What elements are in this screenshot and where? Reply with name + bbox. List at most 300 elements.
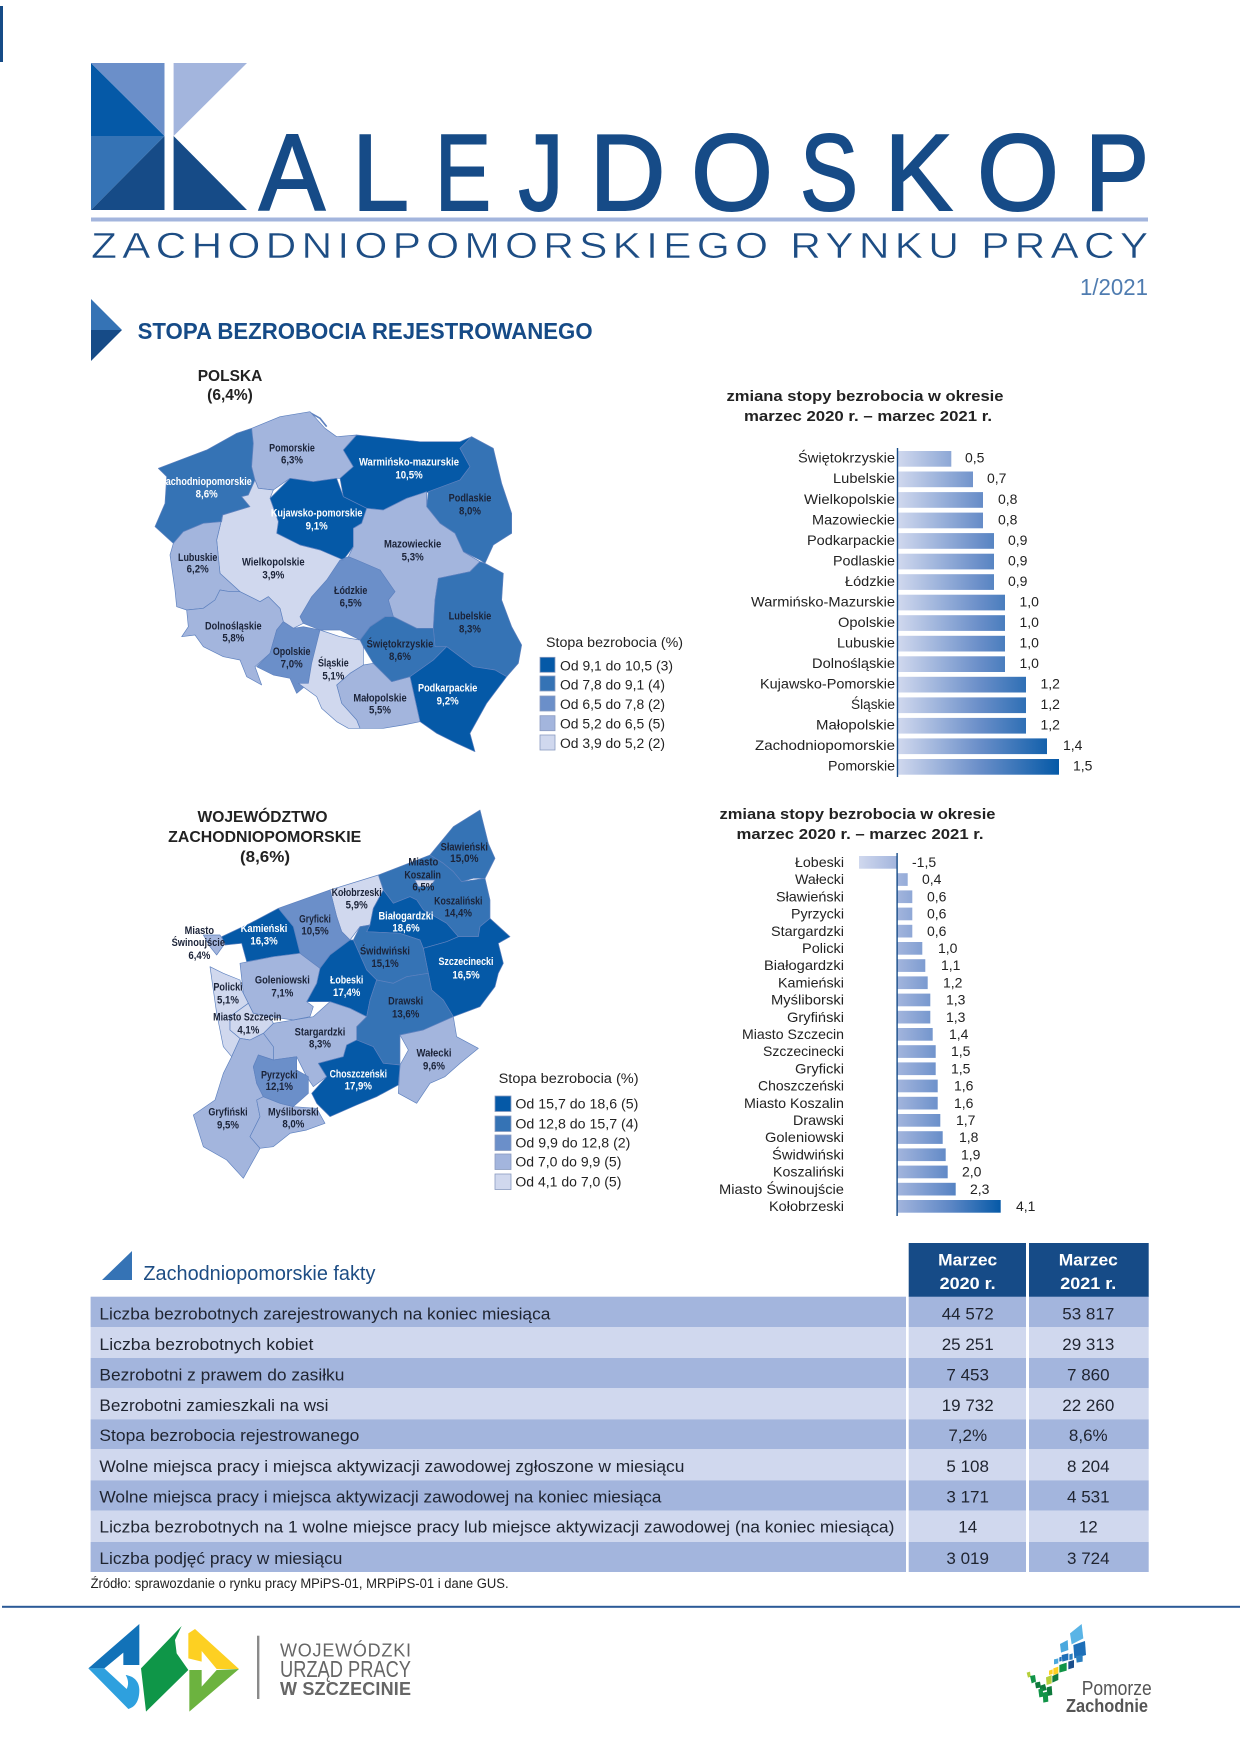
bar: Kujawsko-Pomorskie: [760, 676, 1060, 692]
bar: Świdwiński: Świdwiński: [772, 1145, 844, 1162]
label: Opolskie: 7,0%: [281, 658, 303, 670]
region: Lubelskie: [433, 562, 522, 677]
label: Miasto Koszalin: [404, 856, 441, 894]
table: Zachodniopomorskie facts: [91, 1243, 1149, 1572]
label: Małopolskie: Małopolskie: [353, 693, 407, 705]
label: Łobeski: [330, 975, 363, 999]
logo text: WUP Szczecin: URZĄD PRACY: [280, 1656, 411, 1682]
bar: Opolskie: 1,0: [1020, 614, 1039, 630]
county: Goleniowski: [240, 953, 320, 1020]
bar: Dolnośląskie: Dolnośląskie: [812, 655, 895, 671]
region: Dolnośląskie: [182, 590, 283, 685]
row: registered unemployed: Liczba bezrobotnych zarejestrowanych na koniec miesiąca: [99, 1304, 551, 1323]
county: Koszaliński: [378, 855, 490, 937]
map: Zachodniopomorskie by county: [172, 810, 510, 1178]
county: Choszczeński: [312, 1040, 400, 1117]
bar: Pyrzycki: Pyrzycki: [791, 906, 844, 922]
row: unemployed women: [91, 1327, 1149, 1358]
row: jobs taken up: 3 019: [946, 1549, 989, 1568]
bar: Gryfiński: Gryfiński: [787, 1009, 844, 1025]
row: unemployed per vacancy: Liczba bezrobotnych na 1 wolne miejsce pracy lub miejsce aktywizacji zawodowej (na koniec miesiąca): [99, 1518, 894, 1537]
label: Choszczeński: [330, 1068, 387, 1092]
bar: Miasto Koszalin: 1,6: [954, 1095, 974, 1111]
title: ALEJDOSKOP: S: [800, 112, 858, 234]
bar: Policki: [802, 940, 958, 956]
label: Gryficki: [299, 914, 331, 938]
row: vacancies at month end: [91, 1480, 1149, 1511]
bar: Kołobrzeski: Kołobrzeski: [769, 1198, 844, 1214]
label: Zachodniopomorskie: [160, 476, 252, 501]
legend: county map: Od 4,1 do 7,0 (5): [515, 1174, 621, 1190]
label: Świdwiński: Świdwiński: [360, 944, 410, 957]
row: vacancies reported: 8 204: [1067, 1457, 1110, 1476]
label: Miasto Szczecin: Miasto Szczecin: [213, 1012, 281, 1024]
issue number: 1/2021: [1080, 274, 1148, 300]
bar: Wałecki: Wałecki: [795, 871, 844, 887]
row: rural residents: 22 260: [1062, 1396, 1114, 1415]
bar: Pyrzycki: [791, 906, 947, 922]
region: Małopolskie: [337, 663, 420, 728]
bar: Świętokrzyskie: 0,5: [965, 450, 985, 466]
title: ALEJDOSKOP: D: [590, 112, 666, 234]
label: Małopolskie: [353, 693, 407, 717]
label: Kujawsko-pomorskie: 9,1%: [306, 520, 328, 532]
row: registered unemployed: [91, 1297, 1149, 1327]
label: Drawski: [388, 995, 423, 1020]
county: Stargardzki: [263, 1002, 367, 1087]
title: ALEJDOSKOP: J: [518, 112, 564, 234]
label: Łódzkie: 6,5%: [340, 598, 362, 610]
label: Szczecinecki: [438, 956, 494, 981]
row: unemployment rate: 7,2%: [948, 1426, 987, 1445]
region: Wielkopolskie: [217, 480, 343, 628]
bar: Gryficki: Gryficki: [795, 1060, 844, 1076]
bar: Dolnośląskie: 1,0: [1020, 655, 1039, 671]
facts heading: Zachodniopomorskie fakty: [143, 1263, 375, 1285]
label: Lubuskie: 6,2%: [187, 564, 209, 576]
label: Białogardzki: [378, 910, 434, 935]
bar: Mazowieckie: Mazowieckie: [812, 511, 895, 527]
title: ALEJDOSKOP: O: [691, 112, 773, 234]
row: entitled to benefit: 7 860: [1067, 1366, 1110, 1385]
row: vacancies at month end: 4 531: [1067, 1487, 1110, 1506]
logo mark: WUP Szczecin: [88, 1624, 239, 1712]
heading: Zachodniopomorskie voivodeship: (8,6%): [240, 849, 290, 866]
bar chart: counties: [719, 853, 1036, 1216]
label: Kamieński: [241, 923, 287, 947]
label: Lubuskie: Lubuskie: [178, 552, 217, 564]
label: Choszczeński: Choszczeński: [330, 1068, 387, 1080]
label: Miasto Koszalin: 6,5%: [412, 882, 435, 894]
label: Świętokrzyskie: Świętokrzyskie: [367, 637, 433, 650]
label: Kujawsko-pomorskie: [271, 508, 363, 532]
bar: Zachodniopomorskie: 1,4: [1063, 737, 1083, 753]
label: Choszczeński: 17,9%: [345, 1080, 372, 1092]
masthead rule: [91, 218, 1148, 222]
bar: Miasto Szczecin: Miasto Szczecin: [742, 1026, 844, 1042]
label: Łobeski: Łobeski: [330, 975, 363, 987]
logo text: Pomorze Zachodnie: Zachodnie: [1066, 1696, 1148, 1716]
bar: Wielkopolskie: Wielkopolskie: [804, 491, 895, 507]
legend: county map: Stopa bezrobocia (%): [499, 1071, 639, 1086]
bar: Śląskie: [851, 695, 1060, 713]
heading: Zachodniopomorskie voivodeship: ZACHODNIOPOMORSKIE: [168, 829, 361, 846]
label: Miasto Szczecin: [213, 1012, 281, 1036]
label: Warmińsko-mazurskie: [359, 457, 459, 482]
facts heading: [102, 1251, 375, 1285]
title: ALEJDOSKOP: O: [977, 112, 1059, 234]
bar: Świdwiński: 1,9: [961, 1146, 981, 1162]
label: Podlaskie: Podlaskie: [449, 493, 491, 505]
label: Lubelskie: [449, 610, 491, 635]
bar: Szczecinecki: Szczecinecki: [763, 1043, 844, 1059]
heading: Zachodniopomorskie voivodeship: [168, 808, 361, 866]
bar: Kołobrzeski: 4,1: [1016, 1198, 1036, 1214]
bar: Lubelskie: [833, 470, 1007, 487]
label: Miasto Świnoujście: [172, 925, 225, 962]
label: Drawski: Drawski: [388, 995, 423, 1007]
heading: Zachodniopomorskie voivodeship: WOJEWÓDZTWO: [198, 808, 328, 826]
row: unemployed women: Liczba bezrobotnych kobiet: [99, 1335, 314, 1354]
bar: Mazowieckie: [812, 511, 1018, 528]
title: ALEJDOSKOP: [259, 112, 1149, 234]
label: Kołobrzeski: Kołobrzeski: [332, 887, 382, 899]
bar: Podkarpackie: Podkarpackie: [807, 532, 895, 548]
label: Śląskie: 5,1%: [322, 670, 345, 682]
region: Podkarpackie: [410, 647, 507, 752]
row: entitled to benefit: Bezrobotni z prawem do zasiłku: [99, 1366, 344, 1385]
label: Zachodniopomorskie: Zachodniopomorskie: [160, 476, 252, 488]
chart heading: counties: [720, 807, 996, 843]
bar: Opolskie: Opolskie: [838, 614, 895, 630]
bar: Goleniowski: [765, 1129, 979, 1145]
label: Gryficki: 10,5%: [301, 926, 329, 938]
county: Kołobrzeski: [330, 875, 383, 940]
label: Kujawsko-pomorskie: Kujawsko-pomorskie: [271, 508, 363, 520]
label: Łódzkie: Łódzkie: [334, 585, 367, 597]
bar: Śląskie: Śląskie: [851, 695, 895, 712]
row: unemployment rate: Stopa bezrobocia rejestrowanego: [99, 1426, 359, 1445]
label: Wałecki: Wałecki: [416, 1048, 452, 1060]
label: Policki: 5,1%: [217, 994, 239, 1006]
label: Pomorskie: [269, 443, 315, 467]
county: Wałecki: [398, 1017, 478, 1103]
bar: Świętokrzyskie: [798, 449, 985, 467]
row: unemployed per vacancy: 14: [958, 1518, 977, 1537]
label: Myśliborski: Myśliborski: [268, 1107, 319, 1119]
label: Podkarpackie: [418, 683, 477, 707]
table header: Marzec 2021: 2021 r.: [1060, 1274, 1116, 1293]
bar: Łódzkie: [845, 573, 1028, 590]
bar: Warmińsko-Mazurskie: Warmińsko-Mazurskie: [751, 593, 895, 609]
region: Pomorskie: [252, 412, 357, 490]
heading: Polska: (6,4%): [207, 387, 253, 404]
row: vacancies at month end: 3 171: [946, 1487, 989, 1506]
bar: Białogardzki: [764, 957, 961, 973]
label: Podkarpackie: Podkarpackie: [418, 683, 477, 695]
bar: Podkarpackie: 0,9: [1008, 532, 1028, 548]
logo text: WUP Szczecin: [280, 1640, 411, 1699]
region: Śląskie: [298, 630, 363, 728]
label: Policki: [213, 982, 243, 1006]
label: Świdwiński: [360, 944, 410, 970]
label: Małopolskie: 5,5%: [369, 705, 391, 717]
bar: Pomorskie: [828, 758, 1093, 775]
title: ALEJDOSKOP: K: [884, 112, 952, 234]
label: Pomorskie: 6,3%: [281, 455, 303, 467]
bar: Koszaliński: [773, 1164, 982, 1180]
bar: Lubelskie: Lubelskie: [833, 470, 895, 486]
label: Goleniowski: [255, 974, 310, 999]
label: Kamieński: Kamieński: [241, 923, 287, 935]
chart heading: voivodeships: [726, 389, 1004, 425]
label: Miasto Koszalin: Miasto: [408, 856, 439, 868]
label: Świdwiński: 15,1%: [371, 958, 399, 970]
legend: county map: Od 9,9 do 12,8 (2): [515, 1136, 630, 1150]
bar: Kołobrzeski: [769, 1198, 1036, 1214]
region: Warmińsko-mazurskie: [340, 435, 472, 510]
page edge marker: [0, 6, 3, 62]
label: Sławieński: Sławieński: [441, 842, 488, 854]
label: Pyrzycki: [261, 1069, 298, 1093]
label: Kołobrzeski: [332, 887, 382, 911]
row: vacancies reported: 5 108: [946, 1457, 989, 1476]
region: Lubuskie: [170, 515, 240, 610]
bar: Wałecki: 0,4: [922, 871, 942, 887]
label: Lubelskie: 8,3%: [459, 623, 481, 635]
heading: Polska: [198, 368, 262, 404]
label: Łódzkie: [334, 585, 367, 610]
bar: Świdwiński: [772, 1145, 981, 1162]
legend: Poland map: Od 3,9 do 5,2 (2): [560, 736, 665, 751]
row: jobs taken up: [91, 1542, 1149, 1572]
label: Pyrzycki: 12,1%: [266, 1081, 293, 1093]
county: Miasto Szczecin: [230, 1003, 273, 1040]
bar: Kamieński: Kamieński: [778, 974, 844, 990]
label: Zachodniopomorskie: 8,6%: [196, 489, 218, 501]
bar: Białogardzki: 1,1: [941, 957, 961, 973]
legend: Poland map: Od 6,5 do 7,8 (2): [560, 697, 665, 712]
bar: Kujawsko-Pomorskie: Kujawsko-Pomorskie: [760, 676, 895, 692]
bar: Opolskie: [838, 614, 1039, 631]
heading: Polska: POLSKA: [198, 368, 262, 385]
bar: Koszaliński: 2,0: [962, 1164, 982, 1180]
label: Goleniowski: 7,1%: [271, 987, 294, 999]
chart heading: voivodeships: marzec 2020 r. – marzec 2021 r.: [744, 409, 992, 425]
label: Dolnośląskie: [205, 620, 262, 645]
region: Opolskie: [257, 622, 320, 693]
label: Goleniowski: Goleniowski: [255, 974, 310, 986]
label: Kamieński: 16,3%: [250, 935, 278, 947]
row: vacancies at month end: Wolne miejsca pracy i miejsca aktywizacji zawodowej na koniec miesiąca: [99, 1487, 662, 1506]
row: jobs taken up: 3 724: [1067, 1549, 1110, 1568]
bar: Gryficki: [795, 1060, 971, 1076]
bar: Kamieński: 1,2: [943, 974, 963, 990]
bar: Drawski: Drawski: [793, 1112, 844, 1128]
row: entitled to benefit: 7 453: [946, 1366, 989, 1385]
masthead logo: K triangles: [91, 63, 247, 210]
bar: Policki: 1,0: [938, 940, 958, 956]
row: registered unemployed: 44 572: [942, 1304, 994, 1323]
county: Szczecinecki: [423, 918, 510, 1017]
logo text: Pomorze Zachodnie: [1066, 1678, 1152, 1716]
label: Dolnośląskie: 5,8%: [222, 633, 245, 645]
bar: Goleniowski: Goleniowski: [765, 1129, 844, 1145]
bar: Białogardzki: Białogardzki: [764, 957, 844, 973]
county: Świdwiński: [353, 925, 428, 983]
chart heading: counties: marzec 2020 r. – marzec 2021 r.: [736, 827, 984, 843]
title: ALEJDOSKOP: A: [259, 112, 325, 234]
region: Mazowieckie: [348, 492, 480, 628]
bar: Łobeski: -1,5: [912, 854, 936, 870]
county: Gryfiński: [193, 1033, 273, 1178]
bar: Łobeski: Łobeski: [795, 854, 844, 870]
label: Miasto Szczecin: 4,1%: [237, 1024, 260, 1036]
row: entitled to benefit: [91, 1358, 1149, 1388]
bar: Stargardzki: Stargardzki: [771, 923, 844, 939]
bar: Miasto Szczecin: 1,4: [949, 1026, 969, 1042]
chart heading: counties: zmiana stopy bezrobocia w okresie: [720, 807, 996, 823]
label: Gryfiński: [208, 1107, 248, 1131]
bar: Lubelskie: 0,7: [987, 470, 1007, 486]
bar: Wielkopolskie: [804, 491, 1018, 508]
bar: Łobeski: [795, 854, 936, 870]
table header: Marzec 2021: [1029, 1243, 1149, 1297]
row: unemployed per vacancy: [91, 1511, 1149, 1542]
bar: Miasto Szczecin: [742, 1026, 969, 1042]
logo text: WUP Szczecin: W SZCZECINIE: [280, 1679, 411, 1699]
bar: Lubuskie: [837, 634, 1039, 652]
label: Drawski: 13,6%: [392, 1008, 420, 1020]
bar: Drawski: 1,7: [956, 1112, 976, 1128]
label: Pomorskie: Pomorskie: [269, 443, 315, 455]
label: Wielkopolskie: [242, 557, 305, 581]
region: Podlaskie: [427, 437, 512, 563]
label: Miasto Świnoujście: 6,4%: [188, 950, 211, 962]
row: unemployment rate: [91, 1419, 1149, 1449]
label: Śląskie: Śląskie: [318, 657, 349, 670]
bar: Śląskie: 1,2: [1040, 696, 1060, 712]
bar: Sławieński: 0,6: [927, 888, 947, 904]
label: Wałecki: [416, 1048, 452, 1072]
bar: Małopolskie: Małopolskie: [816, 717, 895, 733]
label: Koszaliński: Koszaliński: [434, 895, 483, 907]
row: registered unemployed: 53 817: [1062, 1304, 1114, 1323]
label: Białogardzki: 18,6%: [392, 923, 420, 935]
section marker triangle: [91, 299, 122, 361]
bar: Świętokrzyskie: Świętokrzyskie: [798, 449, 895, 466]
legend: county map: Od 15,7 do 18,6 (5): [515, 1096, 638, 1112]
label: Wałecki: 9,6%: [423, 1060, 445, 1072]
bar: Lubuskie: 1,0: [1020, 634, 1039, 650]
bar: Podlaskie: [833, 552, 1028, 569]
label: Śląskie: [318, 657, 349, 682]
row: unemployed women: 29 313: [1062, 1335, 1114, 1354]
label: Stargardzki: [295, 1027, 345, 1050]
label: Lubuskie: [178, 552, 217, 576]
bar: Kujawsko-Pomorskie: 1,2: [1040, 676, 1060, 692]
county: Łobeski: [307, 940, 377, 1017]
bar: Lubuskie: Lubuskie: [837, 634, 895, 650]
bar: Gryfiński: [787, 1009, 966, 1025]
Hel peninsula: [310, 413, 327, 427]
label: Świętokrzyskie: 8,6%: [389, 651, 411, 663]
legend: county map: [495, 1071, 639, 1190]
bar: Łódzkie: Łódzkie: [845, 573, 895, 589]
bar: Zachodniopomorskie: [755, 737, 1083, 754]
row: rural residents: 19 732: [942, 1396, 994, 1415]
bar: Stargardzki: [771, 923, 947, 939]
bar: Warmińsko-Mazurskie: 1,0: [1020, 593, 1039, 609]
label: Łobeski: 17,4%: [333, 987, 361, 999]
bar: Podlaskie: Podlaskie: [833, 552, 895, 568]
logo text: Pomorze Zachodnie: Pomorze: [1082, 1678, 1152, 1700]
bar: Małopolskie: 1,2: [1040, 717, 1060, 733]
bar: Goleniowski: 1,8: [959, 1129, 979, 1145]
label: Dolnośląskie: Dolnośląskie: [205, 620, 262, 632]
label: Gryfiński: 9,5%: [217, 1119, 239, 1131]
county: Sławieński: [430, 810, 495, 882]
bar: Stargardzki: 0,6: [927, 923, 947, 939]
table header: Marzec 2020: Marzec: [938, 1251, 997, 1270]
bar: Choszczeński: [758, 1078, 974, 1094]
label: Szczecinecki: 16,5%: [452, 969, 480, 981]
label: Stargardzki: Stargardzki: [295, 1027, 345, 1039]
label: Szczecinecki: Szczecinecki: [438, 956, 494, 968]
section heading: STOPA BEZROBOCIA REJESTROWANEGO: [138, 318, 593, 344]
table header: Marzec 2020: 2020 r.: [940, 1274, 996, 1293]
row: jobs taken up: Liczba podjęć pracy w miesiącu: [99, 1549, 342, 1568]
label: Miasto Świnoujście: Miasto: [185, 925, 214, 937]
label: Pyrzycki: Pyrzycki: [261, 1069, 298, 1081]
region: Kujawsko-pomorskie: [270, 478, 367, 560]
title: ALEJDOSKOP: E: [435, 112, 491, 234]
label: Wielkopolskie: Wielkopolskie: [242, 557, 305, 569]
row: rural residents: [91, 1388, 1149, 1419]
legend: county map: Od 12,8 do 15,7 (4): [515, 1116, 638, 1132]
label: Białogardzki: Białogardzki: [378, 910, 434, 922]
county: Kamieński: [222, 908, 300, 962]
chart heading: voivodeships: zmiana stopy bezrobocia w okresie: [726, 389, 1004, 405]
bar: Zachodniopomorskie: Zachodniopomorskie: [755, 737, 895, 753]
subtitle: ZACHODNIOPOMORSKIEGO RYNKU PRACY: [91, 226, 1148, 266]
legend: Poland map: Od 5,2 do 6,5 (5): [560, 716, 665, 732]
row: vacancies reported: Wolne miejsca pracy i miejsca aktywizacji zawodowej zgłoszone w miesiącu: [99, 1457, 684, 1476]
legend: Poland map: [540, 635, 683, 751]
bar: Sławieński: Sławieński: [776, 888, 844, 904]
bar: Choszczeński: Choszczeński: [758, 1078, 844, 1094]
bar: Wałecki: [795, 871, 942, 887]
bar: Pyrzycki: 0,6: [927, 906, 947, 922]
logo text: WUP Szczecin: WOJEWÓDZKI: [280, 1640, 411, 1661]
label: Miasto Koszalin: Koszalin: [404, 869, 441, 881]
label: Warmińsko-mazurskie: Warmińsko-mazurskie: [359, 457, 459, 469]
label: Mazowieckie: [384, 539, 441, 564]
legend: Poland map: Stopa bezrobocia (%): [546, 635, 683, 650]
row: vacancies reported: [91, 1449, 1149, 1480]
bar: Myśliborski: Myśliborski: [771, 992, 844, 1008]
bar: Kamieński: [778, 974, 963, 990]
county: Miasto Świnoujście: [203, 935, 225, 955]
county: Pyrzycki: [253, 1055, 308, 1107]
bar: Koszaliński: Koszaliński: [773, 1164, 844, 1180]
label: Miasto Świnoujście: Świnoujście: [172, 936, 225, 949]
label: Wielkopolskie: 3,9%: [262, 569, 285, 581]
table header: Marzec 2021: Marzec: [1059, 1251, 1118, 1270]
source note: Źródło: sprawozdanie o rynku pracy MPiPS-01, MRPiPS-01 i dane GUS.: [91, 1576, 509, 1591]
row: unemployed per vacancy: 12: [1079, 1518, 1098, 1537]
bar: Gryficki: 1,5: [951, 1060, 971, 1076]
